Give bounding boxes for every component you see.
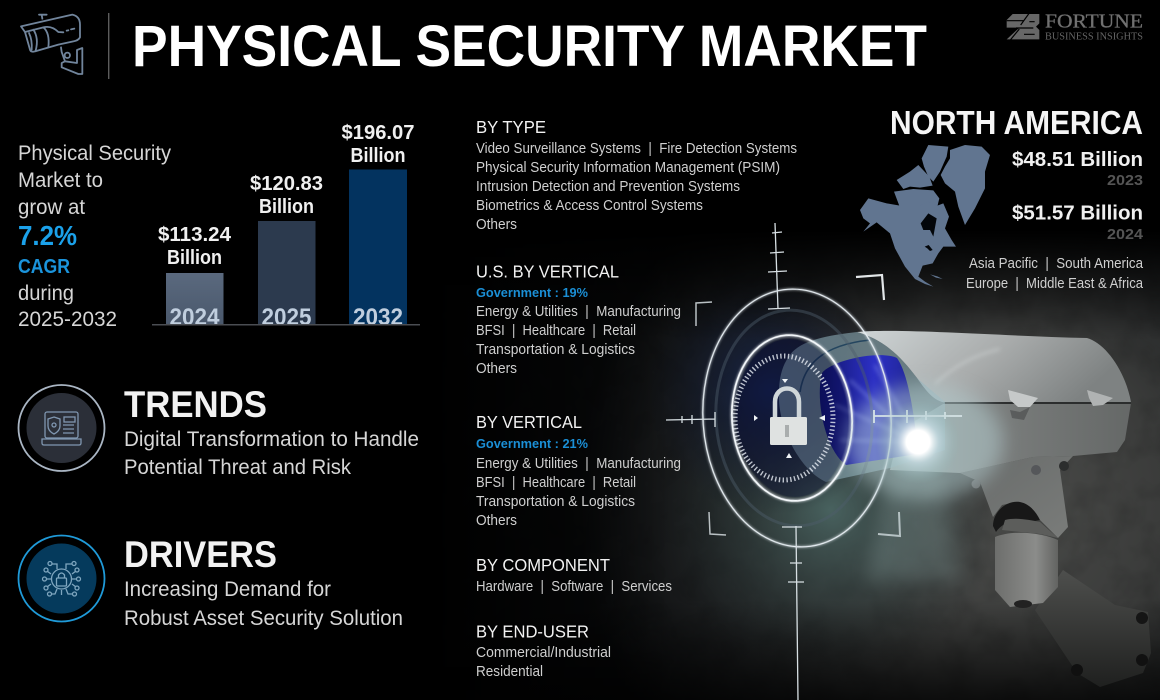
camera seam and clips bbox=[935, 349, 1131, 420]
drivers text: Increasing Demand for bbox=[124, 578, 331, 601]
title: PHYSICAL SECURITY MARKET bbox=[132, 14, 927, 79]
CAGR text block bbox=[18, 142, 171, 331]
bar 2024 bbox=[158, 224, 232, 331]
bar 2024: $113.24 bbox=[158, 224, 232, 246]
segment: U.S. by vertical: Energy & Utilities | Manufacturing bbox=[476, 304, 681, 320]
logo wordmark: FORTUNE bbox=[1045, 11, 1143, 33]
lens flare bbox=[847, 384, 1003, 580]
segment: U.S. by vertical: Transportation & Logistics bbox=[476, 342, 635, 358]
bar 2025 bbox=[250, 173, 323, 331]
targeting rings overlay bbox=[666, 223, 962, 700]
bar 2025: $120.83 bbox=[250, 173, 323, 195]
camera bracket arm bbox=[960, 456, 1073, 538]
CAGR text block: during bbox=[18, 282, 74, 305]
ring pointers bbox=[754, 379, 825, 458]
North America values bbox=[1012, 149, 1144, 243]
segment: by end-user bbox=[476, 622, 611, 680]
segment: by vertical: BFSI | Healthcare | Retail bbox=[476, 475, 636, 491]
CAGR text block: grow at bbox=[18, 196, 85, 219]
camera lower mount arm bbox=[1035, 570, 1151, 687]
segment: U.S. by vertical: BFSI | Healthcare | Retail bbox=[476, 323, 636, 339]
segment: by component: BY COMPONENT bbox=[476, 555, 610, 575]
segment: by vertical: Government : 21% bbox=[476, 437, 588, 451]
trends heading: TRENDS bbox=[124, 384, 267, 425]
trends text bbox=[124, 428, 419, 479]
camera lower housing bbox=[890, 403, 1131, 473]
padlock icon bbox=[770, 388, 807, 445]
other regions bbox=[966, 256, 1144, 292]
lens light streaks bbox=[835, 365, 918, 442]
North America values: $51.57 Billion bbox=[1012, 202, 1143, 224]
header icon: security camera outline bbox=[21, 15, 82, 74]
logo mark bbox=[1007, 13, 1039, 40]
segment: U.S. by vertical bbox=[476, 262, 681, 377]
logo: Fortune Business Insights bbox=[1007, 11, 1143, 42]
North America values: $48.51 Billion bbox=[1012, 149, 1143, 171]
lens rim bbox=[800, 340, 870, 392]
segment: by end-user: BY END-USER bbox=[476, 622, 589, 642]
blue lens glass bbox=[820, 355, 918, 465]
icon: drivers circuit lock bbox=[18, 536, 104, 622]
segment: by type: Video Surveillance Systems | Fire Detection Systems bbox=[476, 141, 797, 157]
bar 2032 bbox=[342, 122, 414, 331]
segment: by end-user: Commercial/Industrial bbox=[476, 645, 611, 661]
segment: by type: Physical Security Information Management (PSIM) bbox=[476, 160, 780, 176]
segment: by type: BY TYPE bbox=[476, 117, 546, 137]
CAGR text block: 7.2% bbox=[18, 220, 77, 251]
icon: trends laptop shield bbox=[18, 385, 104, 471]
segment: by type: Intrusion Detection and Prevention Systems bbox=[476, 179, 740, 195]
outer ring bbox=[694, 283, 900, 553]
tick ring bbox=[735, 356, 833, 480]
segment: by component bbox=[476, 555, 672, 595]
trends text: Potential Threat and Risk bbox=[124, 456, 351, 479]
crosshair scales bbox=[666, 223, 962, 700]
segment: by vertical: Energy & Utilities | Manufacturing bbox=[476, 456, 681, 472]
translucent lens hood bbox=[779, 332, 945, 482]
Arctic lower islands bbox=[894, 189, 939, 208]
Arctic islands bbox=[897, 165, 933, 189]
Great Lakes cut-out bbox=[925, 245, 933, 251]
segment: by type bbox=[476, 117, 797, 233]
camera upper hood bbox=[857, 331, 1131, 403]
bar 2032: 2032 bbox=[353, 304, 403, 331]
segment: by type: Others bbox=[476, 217, 517, 233]
North America values: 2024 bbox=[1107, 226, 1144, 243]
bar 2025: Billion bbox=[259, 196, 314, 218]
header divider bbox=[108, 13, 109, 79]
camera cylindrical joint bbox=[995, 533, 1058, 608]
other regions: Europe | Middle East & Africa bbox=[966, 276, 1144, 292]
bar chart bbox=[152, 122, 420, 331]
mainland bbox=[860, 198, 956, 287]
inner ring bbox=[726, 331, 858, 505]
Baffin and Ellesmere bbox=[922, 145, 948, 182]
corner brackets bbox=[696, 275, 900, 536]
bar 2032: Billion bbox=[350, 145, 406, 167]
other regions: Asia Pacific | South America bbox=[969, 256, 1144, 272]
drivers heading: DRIVERS bbox=[124, 534, 277, 575]
segment: by end-user: Residential bbox=[476, 664, 543, 680]
CAGR text block: Market to bbox=[18, 169, 103, 192]
Cuba bbox=[930, 274, 943, 279]
bar 2032: $196.07 bbox=[342, 122, 414, 144]
segment: by vertical: BY VERTICAL bbox=[476, 412, 582, 432]
Greenland bbox=[941, 145, 990, 225]
CAGR text block: CAGR bbox=[18, 256, 70, 278]
dim ring bbox=[709, 305, 879, 531]
segment: U.S. by vertical: Government : 19% bbox=[476, 286, 588, 300]
bar 2025: 2025 bbox=[262, 304, 312, 331]
CAGR text block: Physical Security bbox=[18, 142, 171, 165]
drivers text bbox=[124, 578, 403, 630]
background: dark concrete wall bbox=[430, 230, 1160, 700]
trends text: Digital Transformation to Handle bbox=[124, 428, 419, 451]
segment: by vertical: Transportation & Logistics bbox=[476, 494, 635, 510]
segment: by vertical bbox=[476, 412, 681, 529]
map: North America bbox=[860, 145, 990, 287]
segment: by type: Biometrics & Access Control Systems bbox=[476, 198, 703, 214]
North America values: 2023 bbox=[1107, 172, 1143, 189]
logo tagline: BUSINESS INSIGHTS bbox=[1045, 32, 1143, 42]
segment: U.S. by vertical: U.S. BY VERTICAL bbox=[476, 262, 619, 282]
bar 2024: Billion bbox=[167, 247, 222, 269]
segment: by vertical: Others bbox=[476, 513, 517, 529]
drivers text: Robust Asset Security Solution bbox=[124, 607, 403, 630]
bar 2024: 2024 bbox=[170, 304, 220, 331]
segment: U.S. by vertical: Others bbox=[476, 361, 517, 377]
segment: by component: Hardware | Software | Services bbox=[476, 579, 672, 595]
Hudson Bay cut-out bbox=[921, 213, 937, 237]
security camera photo bbox=[779, 331, 1151, 687]
CAGR text block: 2025-2032 bbox=[18, 308, 117, 331]
